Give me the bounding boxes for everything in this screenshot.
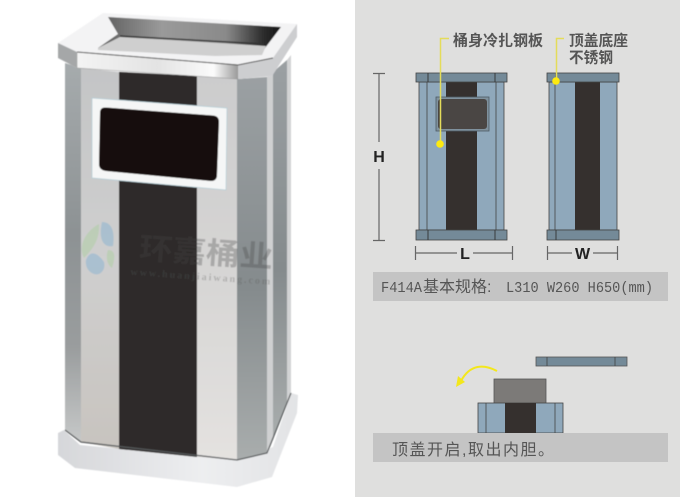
watermark text: 环嘉桶业	[138, 232, 274, 275]
bin top rim and ashtray	[58, 13, 297, 79]
arrow: lid opening direction	[456, 367, 497, 387]
H dimension line: H	[373, 149, 385, 166]
H dimension line	[373, 74, 385, 240]
panel: product photo of the bin	[58, 13, 298, 487]
L dimension line	[416, 246, 512, 263]
specification bar: 基本规格:	[423, 278, 491, 296]
lifted lid	[536, 357, 627, 366]
callout: lid and base material	[552, 32, 628, 85]
bottom cap	[416, 230, 507, 240]
deposit window with white frame	[92, 98, 227, 190]
W dimension line: W	[575, 246, 591, 263]
ashtray opening	[98, 17, 281, 56]
panel: specification background	[355, 0, 680, 497]
open bin body	[478, 403, 563, 433]
bin body	[65, 55, 291, 460]
L dimension line: L	[460, 246, 470, 263]
W dimension line	[548, 246, 618, 263]
top cap	[547, 73, 619, 82]
callout: lid and base material: 不锈钢	[569, 48, 613, 66]
front elevation diagram	[416, 73, 507, 240]
specification bar: L310 W260 H650(mm)	[506, 280, 653, 297]
callout: lid and base material: 顶盖底座	[569, 32, 628, 50]
watermark text: www.huanjiaiwang.com	[130, 267, 271, 288]
bin base plinth	[58, 393, 298, 487]
black centre strip	[119, 72, 197, 457]
specification bar: F414A	[381, 280, 422, 297]
callout: body material	[436, 32, 543, 148]
callout: body material: 桶身冷扎钢板	[453, 32, 543, 50]
bottom cap	[547, 230, 619, 240]
watermark text	[130, 232, 274, 288]
watermark logo	[82, 222, 114, 274]
instruction bar	[373, 433, 668, 462]
top cap	[416, 73, 507, 82]
specification bar	[373, 272, 668, 301]
side elevation diagram	[547, 73, 619, 240]
window	[436, 97, 489, 131]
instruction bar: 顶盖开启,取出内胆。	[392, 441, 555, 459]
inner liner being removed	[494, 379, 546, 404]
